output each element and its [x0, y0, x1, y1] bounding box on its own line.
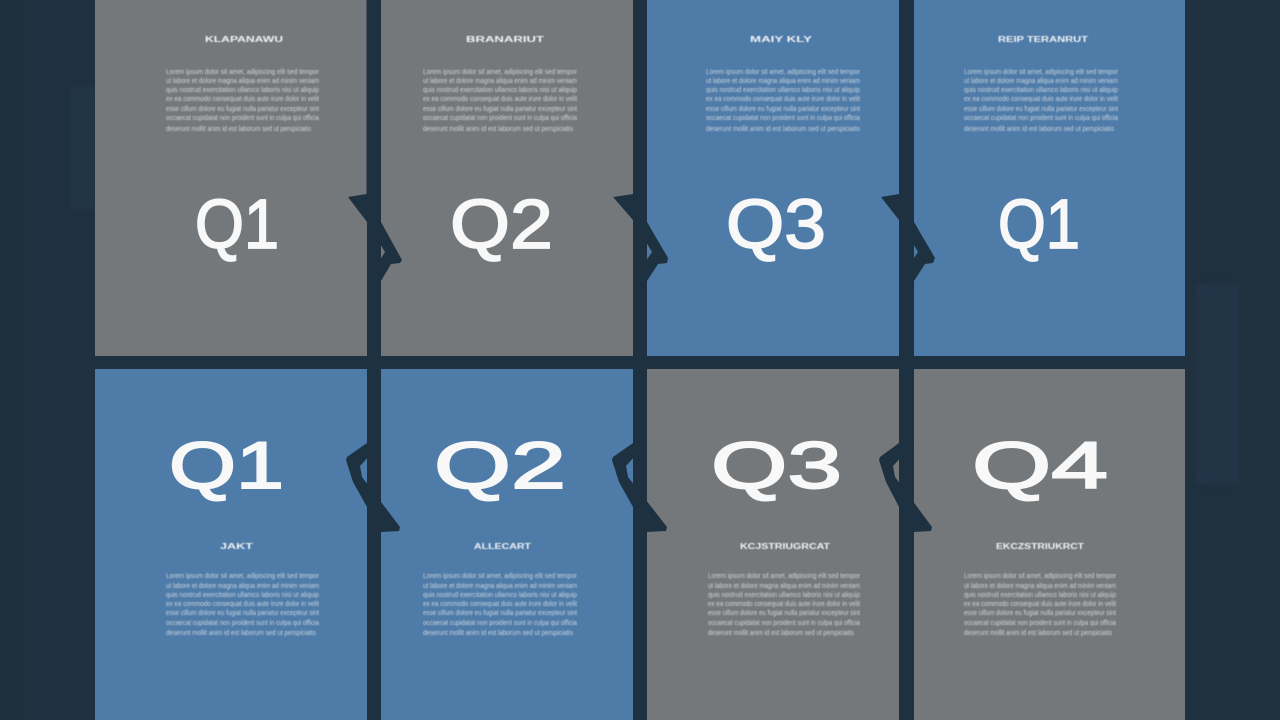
heading: top Q1 right: REIP TERANRUT: [998, 35, 1088, 44]
text block: top Q2: [423, 67, 578, 133]
text block: bottom Q3: ut labore et dolore magna aliqua enim ad minim veniam: [708, 581, 860, 590]
text block: top Q1 right: deserunt mollit anim id est laborum sed ut perspiciatis: [964, 124, 1114, 133]
text block: top Q3: occaecat cupidatat non proident sunt in culpa qui officia: [706, 113, 861, 122]
text block: top Q1: deserunt mollit anim id est laborum sed ut perspiciatis: [166, 124, 311, 133]
text block: top Q1 right: occaecat cupidatat non proident sunt in culpa qui officia: [964, 113, 1119, 122]
text block: top Q1: Lorem ipsum dolor sit amet, adipiscing elit sed tempor: [166, 67, 319, 76]
text block: bottom Q2: occaecat cupidatat non proident sunt in culpa qui officia: [423, 618, 578, 627]
panel: top Q1: [95, 0, 367, 356]
text block: bottom Q4: esse cillum dolore eu fugiat nulla pariatur excepteur sint: [964, 608, 1116, 617]
text block: top Q1 right: [964, 67, 1119, 133]
text block: bottom Q3: occaecat cupidatat non proident sunt in culpa qui officia: [708, 618, 861, 627]
heading: top Q3: MAIY KLY: [750, 35, 813, 44]
text block: bottom Q2: ut labore et dolore magna aliqua enim ad minim veniam: [423, 581, 577, 590]
big label: bottom Q2: Q2: [434, 428, 566, 502]
text block: bottom Q1: Lorem ipsum dolor sit amet, adipiscing elit sed tempor: [166, 571, 319, 580]
panel: top Q2: [381, 0, 633, 356]
arrow: top divider 3: [881, 0, 935, 369]
text block: bottom Q4: quis nostrud exercitation ullamco laboris nisi ut aliquip: [964, 590, 1116, 599]
arrow: top divider 1: [348, 0, 402, 369]
text block: top Q3: [706, 67, 861, 133]
text block: bottom Q1: deserunt mollit anim id est laborum sed ut perspiciatis: [166, 628, 316, 637]
text block: top Q2: deserunt mollit anim id est laborum sed ut perspiciatis: [423, 124, 573, 133]
text block: top Q3: quis nostrud exercitation ullamco laboris nisi ut aliquip: [706, 85, 860, 94]
text block: top Q3: esse cillum dolore eu fugiat nulla pariatur excepteur sint: [706, 104, 860, 113]
big label: bottom Q3: Q3: [711, 428, 842, 502]
text block: bottom Q3: Lorem ipsum dolor sit amet, adipiscing elit sed tempor: [708, 571, 860, 580]
text block: bottom Q1: ex ea commodo consequat duis aute irure dolor in velit: [166, 599, 319, 608]
text block: top Q3: ut labore et dolore magna aliqua enim ad minim veniam: [706, 76, 860, 85]
text block: top Q1: ut labore et dolore magna aliqua enim ad minim veniam: [166, 76, 319, 85]
text block: bottom Q4: Lorem ipsum dolor sit amet, adipiscing elit sed tempor: [964, 571, 1116, 580]
heading: bottom Q2: ALLECART: [474, 542, 531, 551]
heading: bottom Q4: EKCZSTRIUKRCT: [996, 542, 1084, 551]
text block: top Q3: Lorem ipsum dolor sit amet, adipiscing elit sed tempor: [706, 67, 860, 76]
horizontal divider: [95, 356, 1185, 369]
panel: bottom Q1: [95, 369, 367, 720]
arrow: top divider 2: [613, 0, 668, 369]
text block: bottom Q2: Lorem ipsum dolor sit amet, adipiscing elit sed tempor: [423, 571, 577, 580]
text block: top Q2: quis nostrud exercitation ullamco laboris nisi ut aliquip: [423, 85, 577, 94]
panel: top Q1 right: [914, 0, 1185, 356]
panel: top Q3: [647, 0, 899, 356]
text block: top Q1: quis nostrud exercitation ullamco laboris nisi ut aliquip: [166, 85, 319, 94]
big label: top Q2: Q2: [450, 185, 553, 263]
text block: top Q1: esse cillum dolore eu fugiat nulla pariatur excepteur sint: [166, 104, 319, 113]
text block: bottom Q4: deserunt mollit anim id est laborum sed ut perspiciatis: [964, 628, 1112, 637]
text block: top Q2: esse cillum dolore eu fugiat nulla pariatur excepteur sint: [423, 104, 577, 113]
text block: top Q1 right: ut labore et dolore magna aliqua enim ad minim veniam: [964, 76, 1118, 85]
text block: top Q1: [166, 67, 320, 133]
big label: top Q3: Q3: [726, 185, 826, 263]
text block: bottom Q2: ex ea commodo consequat duis aute irure dolor in velit: [423, 599, 577, 608]
text block: bottom Q4: ut labore et dolore magna aliqua enim ad minim veniam: [964, 581, 1116, 590]
text block: bottom Q4: ex ea commodo consequat duis aute irure dolor in velit: [964, 599, 1116, 608]
text block: top Q2: ut labore et dolore magna aliqua enim ad minim veniam: [423, 76, 577, 85]
text block: top Q1: ex ea commodo consequat duis aute irure dolor in velit: [166, 94, 319, 103]
text block: bottom Q1: esse cillum dolore eu fugiat nulla pariatur excepteur sint: [166, 608, 319, 617]
text block: bottom Q1: [166, 571, 320, 637]
text block: bottom Q1: quis nostrud exercitation ullamco laboris nisi ut aliquip: [166, 590, 319, 599]
text block: bottom Q1: occaecat cupidatat non proident sunt in culpa qui officia: [166, 618, 320, 627]
heading: top Q1: KLAPANAWU: [205, 35, 283, 44]
text block: bottom Q3: deserunt mollit anim id est laborum sed ut perspiciatis: [708, 628, 854, 637]
arrow: bottom divider 3: [879, 356, 932, 720]
text block: bottom Q4: occaecat cupidatat non proident sunt in culpa qui officia: [964, 618, 1117, 627]
big label: top Q1: Q1: [195, 185, 279, 263]
heading: bottom Q3: KCJSTRIUGRCAT: [740, 542, 830, 551]
text block: bottom Q4: [964, 571, 1117, 637]
text block: bottom Q3: ex ea commodo consequat duis aute irure dolor in velit: [708, 599, 860, 608]
big label: top Q1 right: Q1: [998, 185, 1080, 263]
text block: top Q1 right: quis nostrud exercitation ullamco laboris nisi ut aliquip: [964, 85, 1118, 94]
text block: bottom Q2: quis nostrud exercitation ullamco laboris nisi ut aliquip: [423, 590, 577, 599]
text block: top Q2: occaecat cupidatat non proident sunt in culpa qui officia: [423, 113, 578, 122]
big label: bottom Q1: Q1: [169, 428, 284, 502]
heading: bottom Q1: JAKT: [220, 542, 253, 551]
panel: bottom Q2: [381, 369, 633, 720]
text block: bottom Q3: quis nostrud exercitation ullamco laboris nisi ut aliquip: [708, 590, 860, 599]
panel: bottom Q4: [914, 369, 1185, 720]
text block: top Q2: Lorem ipsum dolor sit amet, adipiscing elit sed tempor: [423, 67, 577, 76]
arrow: bottom divider 1: [346, 356, 400, 720]
panel: bottom Q3: [647, 369, 899, 720]
text block: bottom Q2: [423, 571, 578, 637]
text block: top Q1 right: esse cillum dolore eu fugiat nulla pariatur excepteur sint: [964, 104, 1118, 113]
text block: bottom Q3: esse cillum dolore eu fugiat nulla pariatur excepteur sint: [708, 608, 860, 617]
big label: bottom Q4: Q4: [972, 428, 1108, 502]
heading: top Q2: BRANARIUT: [466, 35, 544, 44]
text block: top Q3: ex ea commodo consequat duis aute irure dolor in velit: [706, 94, 860, 103]
text block: top Q1: occaecat cupidatat non proident sunt in culpa qui officia: [166, 113, 320, 122]
text block: top Q3: deserunt mollit anim id est laborum sed ut perspiciatis: [706, 124, 860, 133]
text block: top Q1 right: ex ea commodo consequat duis aute irure dolor in velit: [964, 94, 1118, 103]
text block: bottom Q1: ut labore et dolore magna aliqua enim ad minim veniam: [166, 581, 319, 590]
text block: bottom Q2: deserunt mollit anim id est laborum sed ut perspiciatis: [423, 628, 573, 637]
text block: top Q2: ex ea commodo consequat duis aute irure dolor in velit: [423, 94, 577, 103]
text block: bottom Q3: [708, 571, 861, 637]
text block: bottom Q2: esse cillum dolore eu fugiat nulla pariatur excepteur sint: [423, 608, 577, 617]
arrow: bottom divider 2: [612, 356, 667, 720]
text block: top Q1 right: Lorem ipsum dolor sit amet, adipiscing elit sed tempor: [964, 67, 1118, 76]
